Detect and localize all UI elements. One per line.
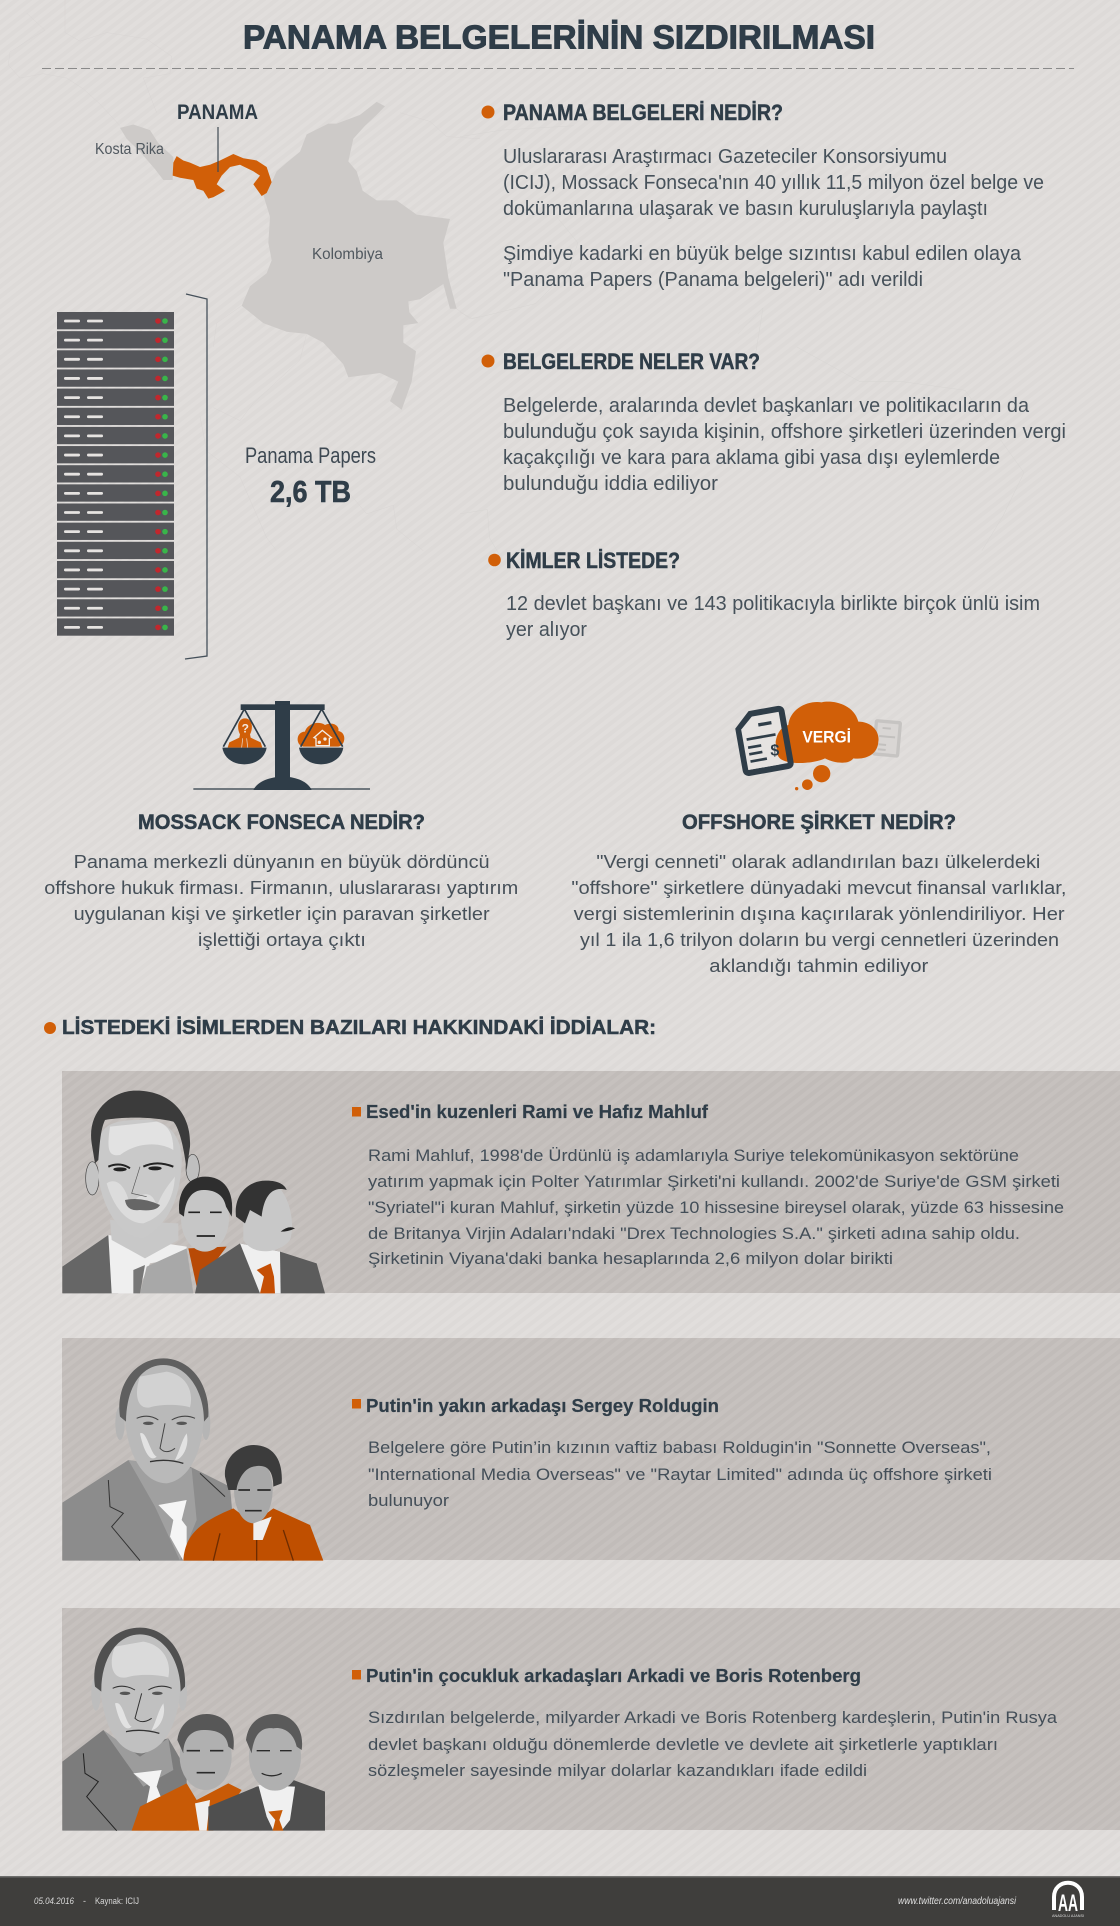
icon: orange silhouette: ?: [242, 721, 249, 735]
panel: Sergey Roldugin: Putin'in yakın arkadaşı Sergey Roldugin: [366, 1396, 719, 1416]
panel text: [368, 1438, 992, 1510]
section: Offshore şirket: "offshore" şirketlere dünyadaki mevcut finansal varlıklar,: [571, 878, 1066, 898]
section: Belgelerde neler var: [482, 349, 1066, 495]
section: Mossack Fonseca: işlettiği ortaya çıktı: [198, 930, 366, 950]
panel: Esed kuzenleri: [62, 1071, 1120, 1293]
icon: scales: [193, 701, 370, 790]
panel text: Şirketinin Viyana'daki banka hesaplarında 2,6 milyon dolar birikti: [368, 1249, 893, 1268]
section: Belgelerde neler var: bulunduğu iddia ediliyor: [503, 473, 718, 495]
footer date and source: 05.04.2016: [34, 1896, 74, 1906]
section: Panama Belgeleri nedir: [482, 100, 1044, 291]
section: Belgelerde neler var: kaçakçılığı ve kara para aklama gibi yasa dışı eylemlerde: [503, 447, 1000, 469]
panel heading: [352, 1670, 361, 1680]
map: Colombia: [242, 102, 457, 410]
section: Mossack Fonseca: [44, 811, 518, 950]
data size label: [245, 443, 376, 509]
icon: tax documents and cloud: $: [770, 743, 779, 760]
icon: orange cloud: [775, 702, 879, 763]
logo: AA: AA: [1058, 1890, 1078, 1917]
title: PANAMA BELGELERİNİN SIZDIRILMASI: [243, 18, 875, 56]
section: Mossack Fonseca: offshore hukuk firması. Firmanın, uluslararası yaptırım: [44, 878, 518, 898]
section: Offshore şirket: OFFSHORE ŞİRKET NEDİR?: [682, 811, 956, 834]
panel text: [368, 1708, 1058, 1780]
section: Offshore şirket: aklandığı tahmin ediliyor: [709, 956, 928, 976]
panel heading: [352, 1107, 361, 1116]
section: Panama Belgeleri nedir: Şimdiye kadarki en büyük belge sızıntısı kabul edilen olaya: [503, 243, 1022, 265]
map label: Kolombiya: Kolombiya: [312, 246, 383, 263]
footer twitter address: www.twitter.com/anadoluajansi: [898, 1896, 1017, 1907]
panel: Rotenberg: [62, 1608, 1120, 1831]
panel text: Rami Mahluf, 1998'de Ürdünlü iş adamlarıyla Suriye telekomünikasyon sektörüne: [368, 1146, 1019, 1165]
footer: -: [83, 1896, 86, 1906]
icon: tax documents and cloud: VERGİ: [802, 727, 851, 746]
panel: Esed kuzenleri: Esed'in kuzenleri Rami ve Hafız Mahluf: [366, 1102, 709, 1122]
illustration: three men: [62, 1091, 325, 1293]
icon: dark document: [736, 708, 791, 773]
section: Belgelerde neler var: Belgelerde, aralarında devlet başkanları ve politikacıların da: [503, 395, 1030, 417]
panel text: devlet başkanı olduğu dönemlerde devletle ve devlete ait şirketlerle yaptıkları: [368, 1735, 998, 1754]
icon: tax documents and cloud: [736, 702, 902, 790]
logo: AA: [1052, 1883, 1084, 1918]
footer: Kaynak: ICIJ: [95, 1896, 139, 1906]
panel text: yatırım yapmak için Polter Yatırımlar Şirketi'ni kullandı. 2002'de Suriye'de GSM şirketi: [368, 1172, 1060, 1191]
section: Offshore şirket: yıl 1 ila 1,6 trilyon doların bu vergi cennetleri üzerinden: [580, 930, 1059, 950]
icon: grey document: [872, 719, 902, 758]
map: Panama highlighted: [173, 154, 272, 199]
section: Panama Belgeleri nedir: (ICIJ), Mossack Fonseca'nın 40 yıllık 11,5 milyon özel belge ve: [503, 172, 1044, 194]
section heading: list: LİSTEDEKİ İSİMLERDEN BAZILARI HAKKINDAKİ İDDİALAR:: [62, 1016, 656, 1039]
logo: AA: ANADOLU AJANSI: [1052, 1914, 1084, 1918]
section: Panama Belgeleri nedir: PANAMA BELGELERİ NEDİR?: [503, 100, 783, 125]
section: Mossack Fonseca: Panama merkezli dünyanın en büyük dördüncü: [74, 852, 490, 872]
section: Panama Belgeleri nedir: Uluslararası Araştırmacı Gazeteciler Konsorsiyumu: [503, 146, 947, 168]
panel text: Belgelere göre Putin’in kızının vaftiz babası Roldugin'in "Sonnette Overseas",: [368, 1438, 991, 1457]
section: Kimler listede: [488, 548, 1040, 641]
section: Belgelerde neler var: BELGELERDE NELER VAR?: [503, 349, 760, 374]
section: Offshore şirket: [571, 811, 1066, 976]
map: Panama and neighbours: [95, 101, 457, 410]
panel text: bulunuyor: [368, 1491, 449, 1510]
panel: Rotenberg: Putin'in çocukluk arkadaşları Arkadi ve Boris Rotenberg: [366, 1666, 861, 1686]
panel text: "Syriatel"i kuran Mahluf, şirketin yüzde 10 hissesine bireysel olarak, yüzde 63 hissesine: [368, 1198, 1064, 1217]
illustration: two men: [62, 1358, 323, 1561]
section: Mossack Fonseca: uygulanan kişi ve şirketler için paravan şirketler: [74, 904, 490, 924]
panel text: de Britanya Virjin Adaları'ndaki "Drex Technologies S.A." şirketi adına sahip oldu.: [368, 1224, 1020, 1243]
map: Costa Rica: [120, 124, 173, 180]
bracket: [185, 294, 207, 659]
panel text: [368, 1146, 1064, 1268]
section: Kimler listede: yer alıyor: [506, 619, 587, 641]
section: Offshore şirket: "Vergi cenneti" olarak adlandırılan bazı ülkelerdeki: [596, 852, 1040, 872]
map label: Panama: PANAMA: [177, 101, 258, 124]
panel: Sergey Roldugin: [62, 1338, 1120, 1561]
map label: Kosta Rika: Kosta Rika: [95, 141, 164, 158]
panel text: "International Media Overseas" ve "Raytar Limited" adında üç offshore şirketi: [368, 1465, 992, 1484]
section: Kimler listede: KİMLER LİSTEDE?: [506, 548, 680, 573]
section: Panama Belgeleri nedir: dokümanlarına ulaşarak ve basın kuruluşlarıyla paylaştı: [503, 198, 988, 220]
panel text: sözleşmeler sayesinde milyar dolarlar kazandıkları ifade edildi: [368, 1761, 867, 1780]
section: Kimler listede: 12 devlet başkanı ve 143 politikacıyla birlikte birçok ünlü isim: [506, 593, 1040, 615]
icon: server rack: [57, 312, 174, 636]
data size label: Panama Papers: [245, 443, 376, 468]
icon: orange cloud house: [298, 723, 344, 747]
section: Offshore şirket: vergi sistemlerinin dışına kaçırılarak yönlendiriliyor. Her: [574, 904, 1065, 924]
section: Panama Belgeleri nedir: "Panama Papers (Panama belgeleri)" adı verildi: [503, 269, 923, 291]
footer: [0, 1876, 1120, 1926]
section: Mossack Fonseca: MOSSACK FONSECA NEDİR?: [138, 811, 425, 834]
panel text: Sızdırılan belgelerde, milyarder Arkadi ve Boris Rotenberg kardeşlerin, Putin'in Rusya: [368, 1708, 1058, 1727]
data size label: 2,6 TB: [270, 474, 351, 509]
icon: orange silhouette: [228, 718, 262, 748]
section: Belgelerde neler var: bulunduğu çok sayıda kişinin, offshore şirketleri üzerinden vergi: [503, 421, 1066, 443]
illustration: three men: [62, 1628, 325, 1831]
panel heading: [352, 1399, 361, 1408]
